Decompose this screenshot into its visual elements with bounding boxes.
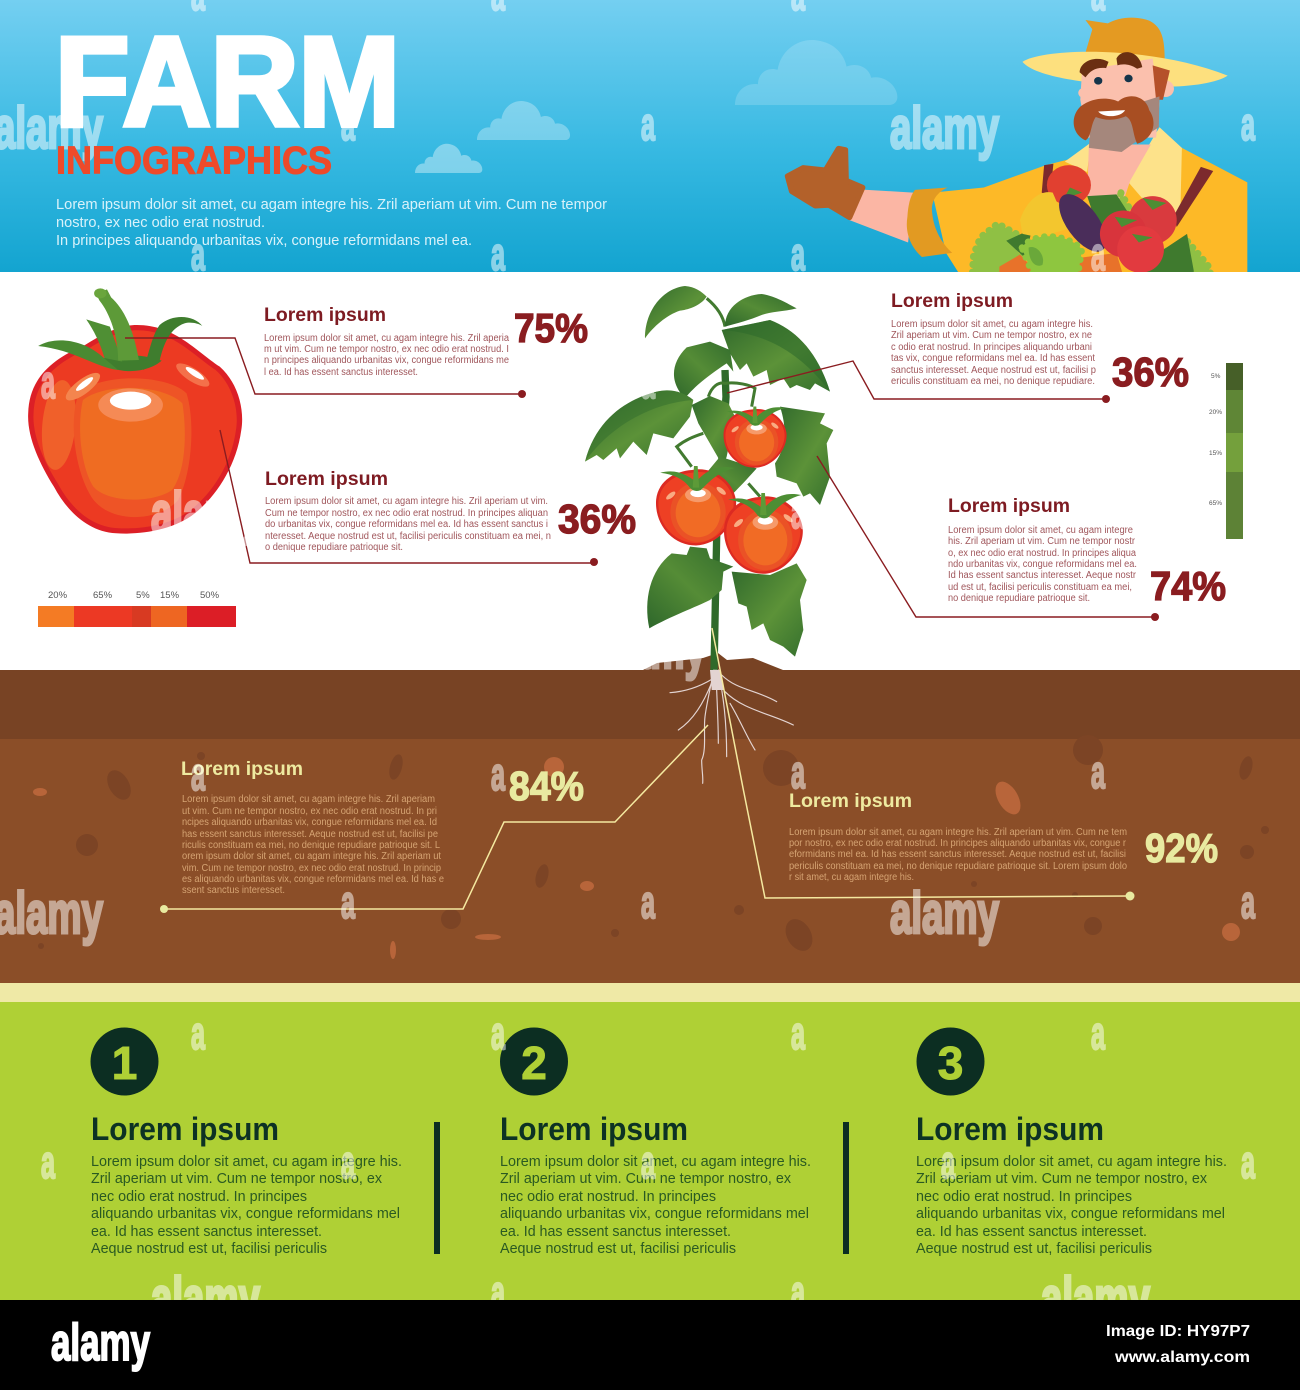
body text: Lorem ipsum dolor sit amet, cu agam integre his. (500, 1154, 811, 1170)
tomatoes (1129, 196, 1177, 244)
body text: riculis constituam ea mei, no denique repudiare patrioque sit. L (182, 840, 440, 851)
tomatoes (656, 406, 803, 574)
body text: ndo urbanitas vix, congue reformidans mel ea. (948, 559, 1137, 570)
stem (714, 370, 726, 672)
body text: Lorem ipsum dolor sit amet, cu agam integre his. (891, 319, 1093, 330)
green footer panel (0, 1002, 1300, 1300)
watermark layer: a (491, 1007, 505, 1059)
body text: o denique repudiare patrioque sit. (265, 542, 403, 553)
hat (1022, 18, 1228, 87)
body text: nec odio erat nostrud. In principes (916, 1189, 1132, 1205)
leader lines from plant (727, 361, 1155, 617)
heading: Lorem ipsum (264, 305, 386, 326)
stock footer band (0, 1300, 1300, 1390)
pepper leaf (1061, 187, 1082, 203)
body text: aliquando urbanitas vix, congue reformidans mel (916, 1206, 1225, 1222)
watermark layer: a (191, 1007, 205, 1059)
heading: Farm: FARM (55, 10, 400, 152)
watermark layer: a (341, 1136, 355, 1188)
stacked bar: plant: 15% (1209, 450, 1222, 457)
number badge: 1 (112, 1037, 137, 1089)
watermark layer: a (641, 98, 655, 150)
percent: 36% (558, 496, 636, 542)
image id: Image ID: HY97P7 (1106, 1323, 1250, 1340)
number badge: 2 (521, 1037, 547, 1089)
body text (948, 525, 1137, 604)
dark greens (1006, 194, 1194, 282)
body text: eformidans mel ea. Id has essent sanctus interesset. Aeque nostrud est ut, facilisi (789, 849, 1126, 860)
body text: es aliquando urbanitas vix, congue reformidans mel ea. Id has e (182, 874, 444, 885)
image id (1106, 1323, 1250, 1366)
watermark layer: a (1241, 98, 1255, 150)
watermark layer: a (1091, 1007, 1105, 1059)
body text: por nostro, ex nec odio erat nostrud. In principes aliquando urbanitas vix, congue r (789, 838, 1127, 849)
roots (670, 670, 793, 783)
body text: orem ipsum dolor sit amet, cu agam integre his. Zril aperiam ut (182, 851, 441, 862)
body text: Lorem ipsum dolor sit amet, cu agam integre his. (916, 1154, 1227, 1170)
heading: Lorem ipsum (500, 1111, 688, 1147)
body text: nteresset. Aeque nostrud est ut, facilisi periculis constituam ea mei, n (265, 531, 551, 542)
farmer beard (1074, 96, 1160, 152)
body text: aliquando urbanitas vix, congue reformidans mel (91, 1206, 400, 1222)
header sky background (0, 0, 1300, 272)
step 2 (500, 1028, 811, 1257)
watermark layer: a (41, 356, 55, 408)
stacked bar: plant: 65% (1209, 500, 1222, 507)
watermark layer: alamy (151, 481, 260, 546)
heading: Lorem ipsum (916, 1111, 1104, 1147)
callout: soil right (712, 628, 1218, 900)
carrots (999, 253, 1125, 282)
body text: Aeque nostrud est ut, facilisi periculis (91, 1241, 327, 1257)
percent: 74% (1150, 563, 1226, 609)
watermark layer: alamy (151, 1266, 260, 1331)
body text: Id has essent sanctus interesset. Aeque nostr (948, 570, 1137, 581)
yellow pepper (1020, 192, 1068, 237)
body text (916, 1154, 1227, 1257)
step 1 (90, 1028, 402, 1257)
tomato plant (585, 286, 833, 783)
body text: m ut vim. Cum ne tempor nostro, ex nec odio erat nostrud. I (264, 344, 509, 355)
body text: has essent sanctus interesset. Aeque nostrud est ut, facilisi pe (182, 829, 438, 840)
watermark layer: a (791, 486, 805, 538)
step 3 (916, 1028, 1227, 1257)
watermark layer: a (191, 228, 205, 280)
body text: Lorem ipsum dolor sit amet, cu agam integre (948, 525, 1133, 536)
watermark layer: a (341, 876, 355, 928)
lettuce leaves (972, 193, 1213, 280)
body text: Zril aperiam ut vim. Cum ne tempor nostro, ex (916, 1171, 1208, 1187)
soil pebbles (38, 735, 1269, 956)
body text: Lorem ipsum dolor sit amet, cu agam integre his. (91, 1154, 402, 1170)
callout: plant top right (891, 291, 1189, 395)
watermark layer: alamy (890, 96, 999, 161)
cabbage (1022, 236, 1082, 279)
step divider (434, 1122, 440, 1254)
callout: plant lower right (948, 496, 1226, 609)
watermark layer: a (491, 228, 505, 280)
number badge: 3 (938, 1037, 963, 1089)
watermark layer: a (491, 748, 505, 800)
watermark layer: a (941, 1136, 955, 1188)
body text: tas vix, congue reformidans mel ea. Id has essent (891, 353, 1095, 364)
leader dots (1102, 395, 1159, 621)
body text: Zril aperiam ut vim. Cum ne tempor nostro, ex (91, 1171, 383, 1187)
number badge (90, 1028, 158, 1096)
intro text: Lorem ipsum dolor sit amet, cu agam integre his. Zril aperiam ut vim. Cum ne tempor (56, 197, 607, 213)
body text: vim. Cum ne tempor nostro, ex nec odio erat nostrud. In princip (182, 863, 441, 874)
step divider (843, 1122, 849, 1254)
stacked bar: plant: 5% (1211, 373, 1221, 380)
body text: Lorem ipsum dolor sit amet, cu agam integre his. Zril aperiam ut vim. Cum ne tem (789, 827, 1127, 838)
stacked bar: tomato: 65% (93, 590, 113, 601)
watermark layer: alamy (1041, 1266, 1150, 1331)
leader line (220, 430, 598, 566)
body text: sanctus interesset. Aeque nostrud est ut, facilisi p (891, 365, 1096, 376)
stacked bar: plant (1209, 363, 1243, 539)
watermark layer: a (641, 356, 655, 408)
intro text (56, 197, 607, 249)
body text: Zril aperiam ut vim. Cum ne tempor nostro, ex (500, 1171, 792, 1187)
heading: Lorem ipsum (265, 469, 388, 490)
farmer arm and cuff (850, 187, 952, 257)
leaves (585, 286, 833, 657)
leader line (125, 338, 526, 398)
large tomato illustration (28, 288, 242, 534)
number badge (916, 1028, 984, 1096)
stacked bar: plant: 20% (1209, 409, 1222, 416)
watermark layer: a (41, 1136, 55, 1188)
farmer head (1078, 52, 1174, 138)
body text: Cum ne tempor nostro, ex nec odio erat nostrud. In principes aliquan (265, 508, 548, 519)
image id: www.alamy.com (1114, 1349, 1250, 1366)
vegetables in arms (972, 165, 1213, 282)
body text: ncipes aliquando urbanitas vix, congue reformidans mel ea. Id (182, 817, 437, 828)
collar and neck (1065, 127, 1182, 220)
watermark layer: a (791, 746, 805, 798)
soil lower layer (0, 739, 1300, 983)
farmer shirt (932, 148, 1247, 286)
watermark layer: a (1241, 1136, 1255, 1188)
leader line (160, 725, 708, 913)
heading: Lorem ipsum (891, 291, 1013, 312)
heading: Lorem ipsum (181, 759, 303, 780)
body text: Lorem ipsum dolor sit amet, cu agam integre his. Zril aperiam (182, 794, 435, 805)
heading: Lorem ipsum (91, 1111, 279, 1147)
clouds (415, 40, 897, 173)
leader line (712, 628, 1134, 900)
stacked bar: tomato: 20% (48, 590, 68, 601)
body text (891, 319, 1096, 387)
watermark layer: a (341, 98, 355, 150)
body text: ut vim. Cum ne tempor nostro, ex nec odio erat nostrud. In pri (182, 806, 437, 817)
stacked bar: tomato: 50% (200, 590, 220, 601)
body text: n principes aliquando urbanitas vix, congue reformidans me (264, 355, 509, 366)
red pepper (1047, 165, 1091, 205)
body text: ea. Id has essent sanctus interesset. (91, 1224, 322, 1240)
branches (677, 298, 760, 497)
soil mound (643, 653, 783, 670)
body text: Aeque nostrud est ut, facilisi periculis (500, 1241, 736, 1257)
watermark layer: a (1241, 876, 1255, 928)
body text (182, 794, 444, 896)
body text: ea. Id has essent sanctus interesset. (916, 1224, 1147, 1240)
white middle panel (0, 272, 1300, 670)
body text: o, ex nec odio erat nostrud. In principes aliqua (948, 548, 1136, 559)
body text (264, 333, 509, 378)
alamy logo: alamy (51, 1314, 150, 1372)
watermark layer: a (791, 228, 805, 280)
body text: ea. Id has essent sanctus interesset. (500, 1224, 731, 1240)
stacked bar: tomato (38, 590, 236, 627)
body text: no denique repudiare patrioque sit. (948, 593, 1090, 604)
body text: Lorem ipsum dolor sit amet, cu agam integre his. Zril aperiam ut vim. (265, 496, 548, 507)
cabbage fold (1029, 247, 1043, 266)
watermark layer: a (191, 748, 205, 800)
watermark layer: a (1091, 228, 1105, 280)
callout: tomato bottom (220, 430, 636, 566)
watermark layer: a (491, 1266, 505, 1318)
tomato calyx (1115, 198, 1166, 243)
percent: 92% (1145, 825, 1218, 871)
stacked bar: tomato: 15% (160, 590, 180, 601)
watermark layer: a (1091, 746, 1105, 798)
farmer illustration (788, 18, 1247, 286)
body text: Zril aperiam ut vim. Cum ne tempor nostro, ex ne (891, 330, 1092, 341)
body text: l ea. Id has essent sanctus interesset. (264, 367, 418, 378)
body text (91, 1154, 402, 1257)
percent: 75% (514, 305, 588, 351)
body text: ud est ut, facilisi periculis constituam ea mei, (948, 582, 1132, 593)
body text (500, 1154, 811, 1257)
cream divider band (0, 983, 1300, 1002)
number badge (500, 1028, 568, 1096)
body text: nec odio erat nostrud. In principes (500, 1189, 716, 1205)
heading: Lorem ipsum (789, 791, 912, 812)
body text: do urbanitas vix, congue reformidans mel ea. Id has essent sanctus i (265, 519, 548, 530)
title (55, 10, 607, 249)
percent: 36% (1112, 349, 1189, 395)
body text: nec odio erat nostrud. In principes (91, 1189, 307, 1205)
watermark layer: a (641, 876, 655, 928)
percent: 84% (509, 763, 584, 809)
heading: Lorem ipsum (948, 496, 1070, 517)
watermark layer: a (641, 1136, 655, 1188)
body text (789, 827, 1127, 883)
body text: his. Zril aperiam ut vim. Cum ne tempor nostr (948, 536, 1136, 547)
body text: r sit amet, cu agam integre his. (789, 872, 914, 883)
stacked bar: tomato: 5% (136, 590, 150, 601)
body text: Lorem ipsum dolor sit amet, cu agam integre his. Zril aperia (264, 333, 509, 344)
subheading: Infographics: INFOGRAPHICS (56, 140, 332, 182)
soil upper layer (0, 670, 1300, 739)
body text: Aeque nostrud est ut, facilisi periculis (916, 1241, 1152, 1257)
body text: periculis constituam ea mei, no denique repudiare patrioque sit. Lorem ipsum dolo (789, 861, 1127, 872)
soil orange stones (33, 757, 1240, 959)
body text: c odio erat nostrud. In principes aliquando urbani (891, 342, 1092, 353)
watermark layer: a (791, 1266, 805, 1318)
body text: aliquando urbanitas vix, congue reformidans mel (500, 1206, 809, 1222)
body text (265, 496, 551, 553)
eggplant (1050, 186, 1115, 259)
callout: soil left (160, 725, 708, 913)
intro text: nostro, ex nec odio erat nostrud. (56, 215, 265, 231)
suspenders (1042, 164, 1213, 227)
intro text: In principes aliquando urbanitas vix, congue reformidans mel ea. (56, 233, 472, 249)
body text: ssent sanctus interesset. (182, 885, 285, 896)
watermark layer: alamy (597, 616, 706, 681)
callout: tomato top (125, 305, 588, 398)
farmer glove (788, 149, 863, 217)
watermark layer: alamy (890, 881, 999, 946)
body text: ericulis constituam ea mei, no denique repudiare. (891, 376, 1095, 387)
watermark layer: a (791, 1007, 805, 1059)
